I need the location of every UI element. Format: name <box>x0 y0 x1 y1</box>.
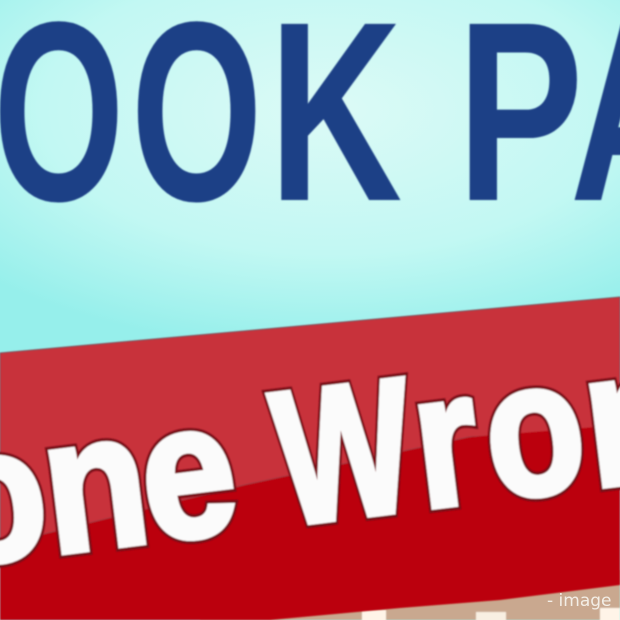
banner text: cropped white slanted words: W <box>263 337 425 565</box>
banner text: cropped white slanted words <box>0 305 620 606</box>
banner lower darker band <box>0 425 620 620</box>
caption: image label: - image <box>547 591 612 611</box>
banner upper lighter band <box>0 297 620 545</box>
photo strip under the banner <box>200 570 620 620</box>
background: teal gradient sky <box>0 0 620 360</box>
heading: cropped blue title letters <box>0 0 620 255</box>
red slanted banner <box>0 297 620 620</box>
banner text: cropped white slanted words: W <box>263 337 425 565</box>
